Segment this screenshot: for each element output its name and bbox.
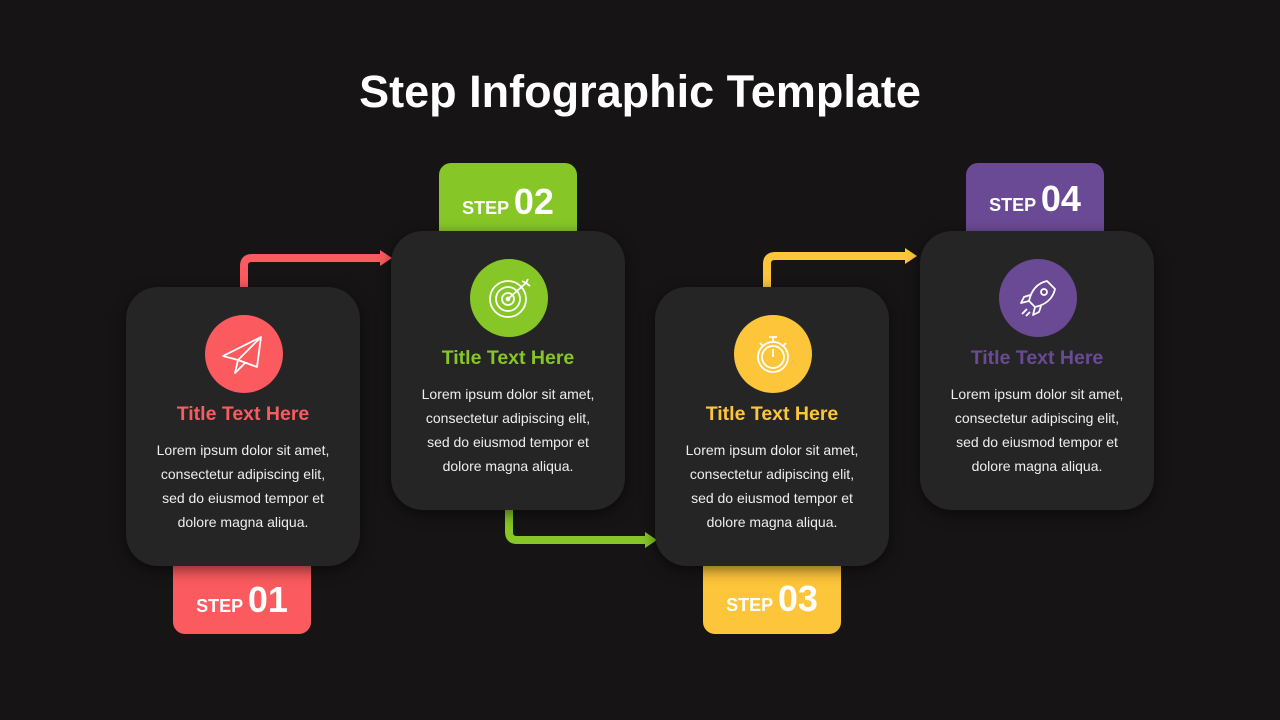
tab: step 02: STEP 02 <box>462 181 554 222</box>
body text <box>422 386 594 474</box>
body text: sed do eiusmod tempor et <box>691 490 853 506</box>
tab: step 04 <box>966 163 1104 237</box>
panel: step 2 <box>391 231 625 510</box>
arrow: yellow <box>767 248 917 290</box>
body text: sed do eiusmod tempor et <box>956 434 1118 450</box>
body text: sed do eiusmod tempor et <box>162 490 324 506</box>
title: Title Text Here <box>706 403 838 425</box>
icon: stopwatch <box>734 315 812 393</box>
body text <box>157 442 329 530</box>
body text: Lorem ipsum dolor sit amet, <box>157 442 329 458</box>
panel: step 1 <box>126 287 360 566</box>
panel: step 3 <box>655 287 889 566</box>
body text: dolore magna aliqua. <box>707 514 837 530</box>
body text: consectetur adipiscing elit, <box>690 466 854 482</box>
body text: Lorem ipsum dolor sit amet, <box>422 386 594 402</box>
icon: rocket <box>999 259 1077 337</box>
arrow: red <box>244 250 392 290</box>
body text: dolore magna aliqua. <box>972 458 1102 474</box>
body text: Lorem ipsum dolor sit amet, <box>686 442 858 458</box>
body text: consectetur adipiscing elit, <box>426 410 590 426</box>
body text: Lorem ipsum dolor sit amet, <box>951 386 1123 402</box>
body text: dolore magna aliqua. <box>178 514 308 530</box>
tab: step 02 <box>439 163 577 237</box>
body text: consectetur adipiscing elit, <box>161 466 325 482</box>
tab: step 01 <box>173 560 311 634</box>
icon: target <box>470 259 548 337</box>
icon: paper plane <box>205 315 283 393</box>
body text: sed do eiusmod tempor et <box>427 434 589 450</box>
panel: step 4 <box>920 231 1154 510</box>
tab: step 01: STEP 01 <box>196 579 288 620</box>
title: Title Text Here <box>442 347 574 369</box>
tab: step 03: STEP 03 <box>726 578 818 619</box>
tab: step 04: STEP 04 <box>989 178 1081 219</box>
arrow: green <box>509 505 657 548</box>
title: Title Text Here <box>971 347 1103 369</box>
body text <box>686 442 858 530</box>
body text <box>951 386 1123 474</box>
title: Title Text Here <box>177 403 309 425</box>
title: Step Infographic Template <box>359 66 921 117</box>
tab: step 03 <box>703 560 841 634</box>
body text: consectetur adipiscing elit, <box>955 410 1119 426</box>
body text: dolore magna aliqua. <box>443 458 573 474</box>
